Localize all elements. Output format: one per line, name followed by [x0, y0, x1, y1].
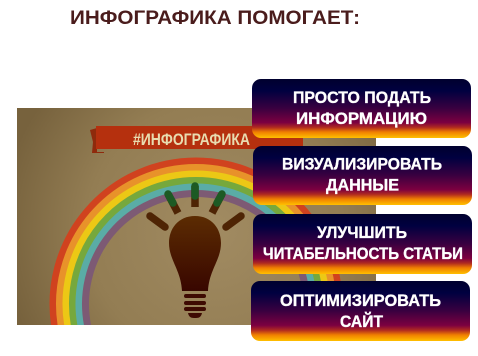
button: improve readability: УЛУЧШИТЬ [317, 223, 407, 242]
button: visualize data: ВИЗУАЛИЗИРОВАТЬ [282, 154, 442, 174]
illustration: infographic poster [17, 108, 376, 327]
icon: light bulb [169, 216, 221, 318]
button: optimize site: САЙТ [340, 312, 384, 331]
button: optimize site: ОПТИМИЗИРОВАТЬ [280, 291, 441, 310]
button: visualize data [253, 146, 472, 205]
button: improve readability [253, 214, 472, 274]
button: optimize site [251, 281, 470, 341]
rainbow [53, 161, 339, 327]
title: ИНФОГРАФИКА ПОМОГАЕТ: [70, 7, 360, 29]
button: visualize data: ДАННЫЕ [326, 176, 399, 194]
banner ribbon: #ИНФОГРАФИКА [133, 130, 250, 149]
button: present information: ИНФОРМАЦИЮ [296, 109, 427, 128]
icon: light bulb rays [150, 186, 241, 227]
button: present information: ПРОСТО ПОДАТЬ [293, 88, 431, 107]
banner ribbon [90, 126, 303, 153]
button: present information [252, 79, 471, 138]
